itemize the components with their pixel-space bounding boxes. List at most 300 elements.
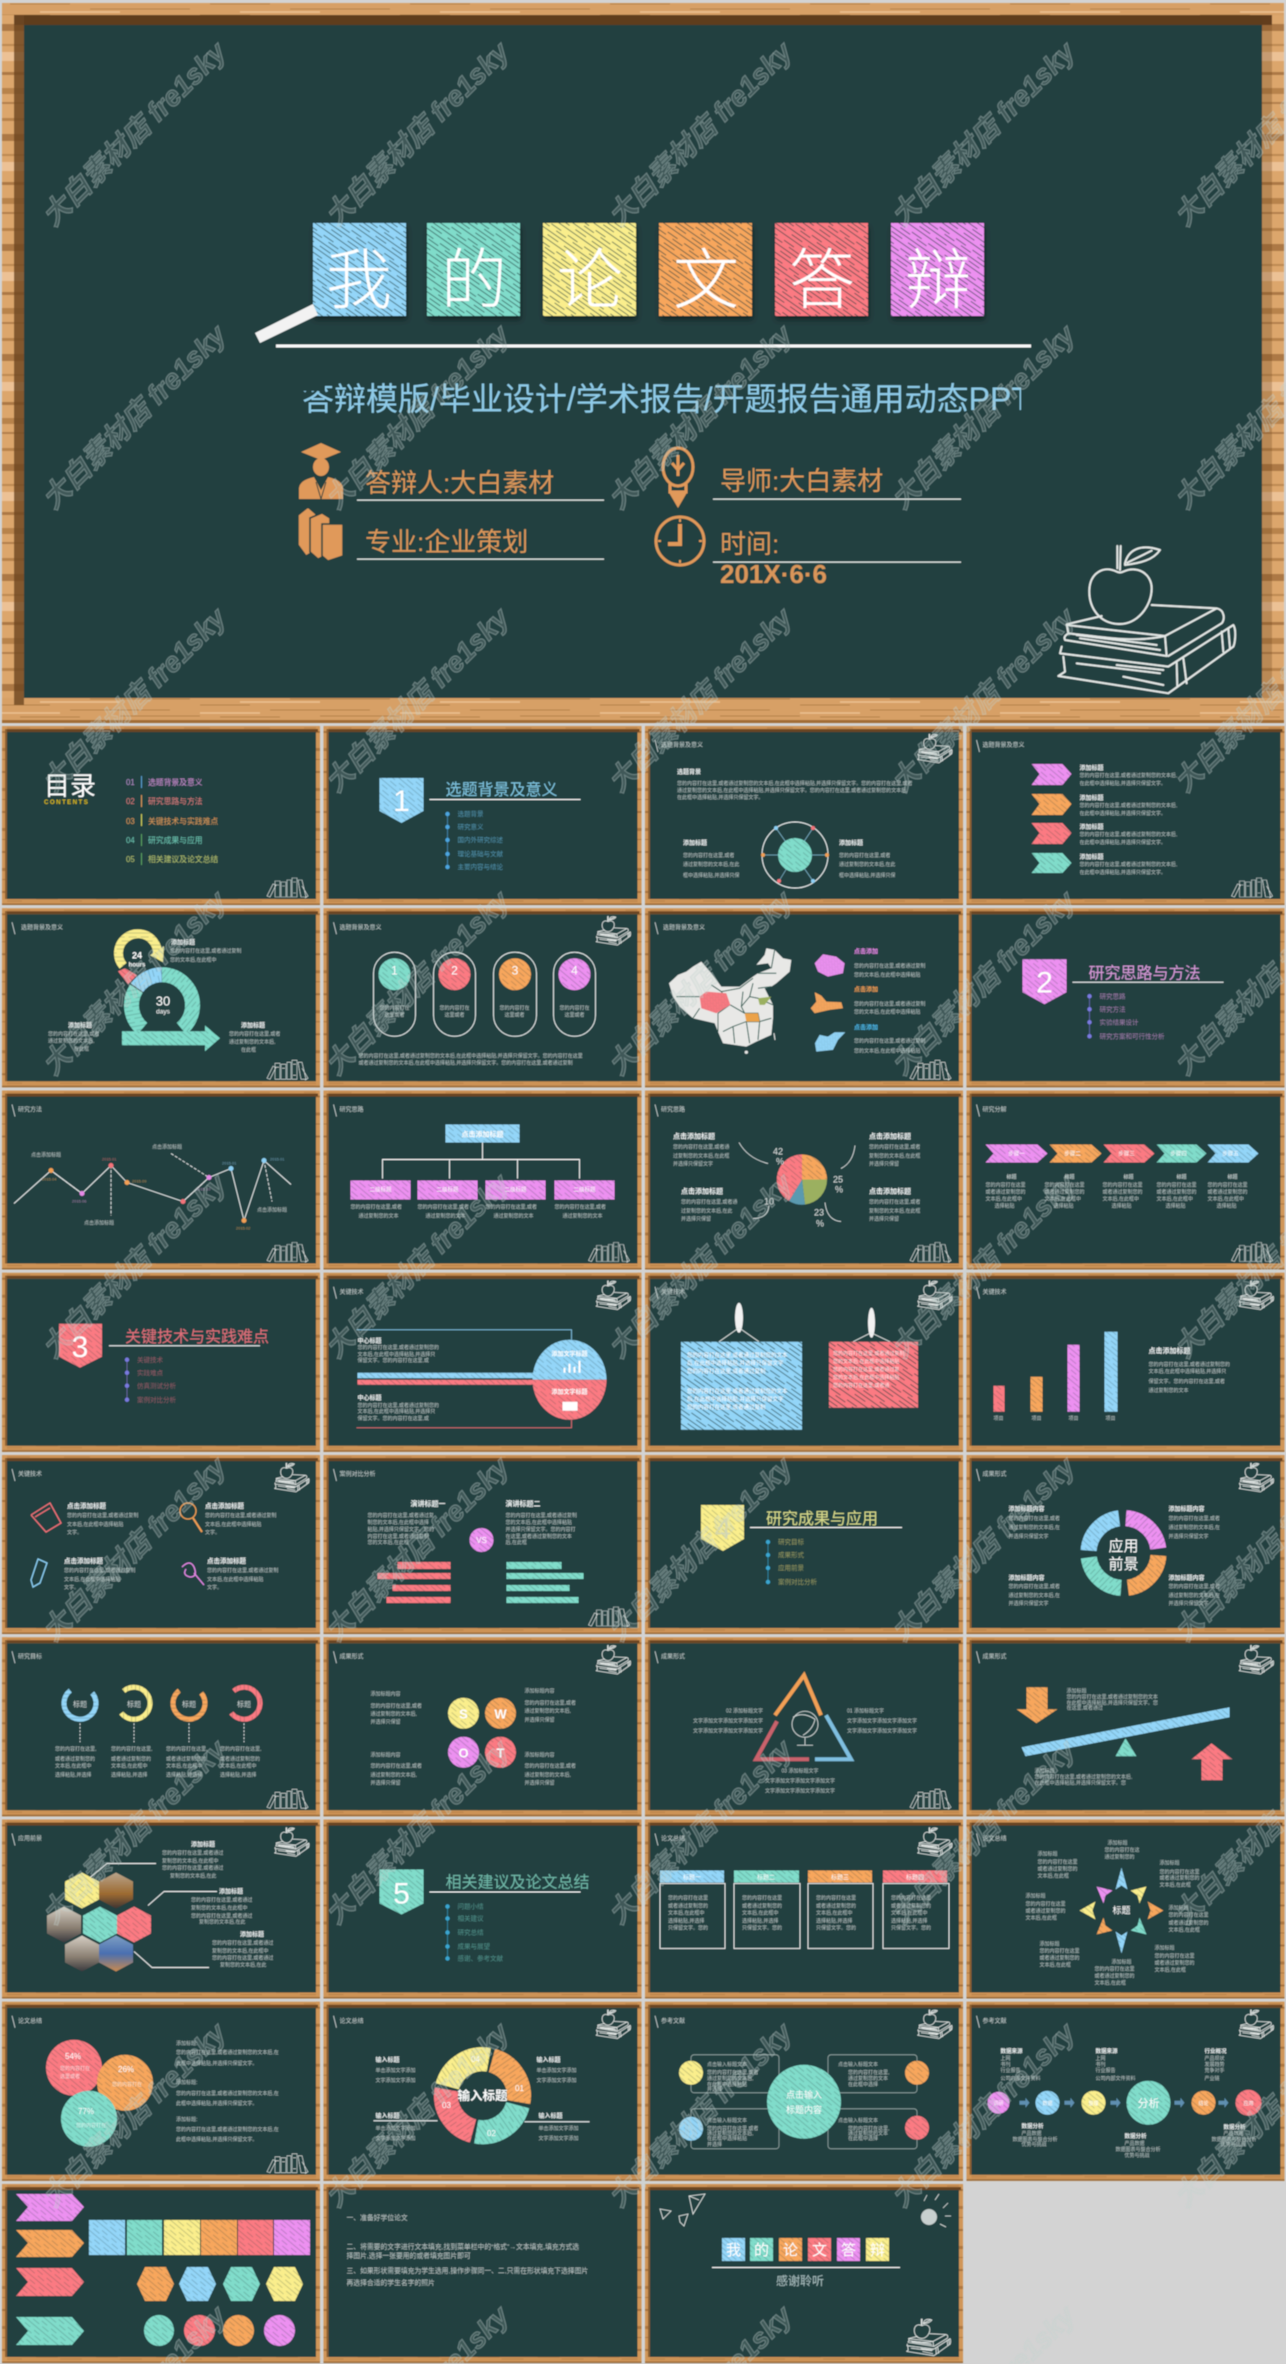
section badge — [701, 1505, 744, 1551]
flow text: 产品数据 — [1124, 2140, 1145, 2147]
star diagram: 标题 — [1112, 1904, 1131, 1916]
seesaw text: 在此框中选择粘贴,并选择只保留文字。您 — [1034, 1779, 1126, 1786]
slide: circular arrows — [2, 1637, 320, 1816]
leader lines — [90, 1864, 217, 1968]
triangle text: 文字添加文字添加文字添加文字 — [765, 1777, 835, 1784]
slide heading: 关键技术 — [661, 1288, 685, 1296]
wooden frame — [2, 3, 1284, 723]
column headers: 标题三 — [831, 1874, 849, 1882]
underline — [712, 2267, 900, 2268]
pins and strings — [719, 1303, 890, 1342]
red bars — [378, 1562, 450, 1603]
slide heading: 研究思路 — [661, 1106, 685, 1114]
box text: 通过复制您的文本 — [848, 2130, 888, 2137]
slide heading — [334, 1104, 364, 1116]
right text — [839, 839, 895, 879]
pills — [374, 952, 596, 1036]
comparison text: 并选择只保留文字。您的内容打 — [506, 1526, 576, 1533]
pill text: 您的内容打在 — [439, 1004, 470, 1011]
ring text: 添加标题内容 — [1168, 1574, 1205, 1582]
column boxes — [660, 1884, 949, 1948]
section badge: 4 — [715, 1513, 731, 1546]
column text: 只保留文字。您的 — [668, 1924, 708, 1932]
icon: books — [298, 507, 343, 561]
triangle text: 文字添加文字添加文字添加文字 — [693, 1727, 763, 1734]
slide: section 4 — [645, 1455, 963, 1634]
map text: 您的文本后,在此框中选择粘贴 — [854, 971, 920, 978]
cycle diagram: 24 — [132, 950, 142, 960]
list text: 您的内容打在这里,或者通过复制您的文本后, — [1080, 831, 1177, 838]
triangle text: 文字添加文字添加文字添加文字 — [693, 1717, 763, 1724]
ring text — [376, 2056, 579, 2142]
triangle arrows — [756, 1675, 851, 1759]
contents list: 01 — [126, 778, 135, 787]
SWOT text: 通过复制您的文本后, — [524, 1771, 571, 1778]
slide heading — [334, 1287, 364, 1299]
flow text: 行业报告 — [1096, 2067, 1116, 2074]
box text: 您的内容打在这里, — [848, 2125, 889, 2132]
column text: 或者通过复制您的 — [816, 1902, 856, 1910]
flow text: 产品现状 — [1204, 2055, 1225, 2062]
column text: 选择粘贴,并选择 — [742, 1918, 778, 1924]
flow text: 公司内部文件资料 — [1000, 2075, 1041, 2082]
seesaw text: 在此框中选择粘贴,并选择只保留文字。您 — [1066, 1699, 1158, 1706]
column text: 选择粘贴,并选择 — [891, 1918, 927, 1924]
star text: 文本后,在此框 — [1154, 1966, 1186, 1974]
columns text — [55, 1745, 261, 1778]
text blocks: 复制您的文本后,在此框 — [869, 1152, 920, 1160]
box text: 点击输入标题文本 — [838, 2117, 878, 2124]
ring labels: 04 — [471, 2055, 480, 2064]
star text: 添加标题 — [1160, 1860, 1180, 1866]
section title: 选题背景及意义 — [446, 780, 558, 799]
ring labels: 输入标题 — [457, 2088, 508, 2103]
section title: 研究思路与方法 — [1088, 964, 1201, 982]
icon text: 文本后,在此框中选择粘贴 — [205, 1521, 261, 1528]
slide heading — [334, 922, 382, 934]
section list — [766, 1537, 818, 1586]
pie values: 10 — [764, 1196, 774, 1206]
slide heading: 选题背景及意义 — [663, 923, 705, 931]
slide heading — [976, 1104, 1007, 1116]
SWOT text: 您的内容打在这里,或者 — [370, 1762, 422, 1769]
flow text: 发展趋势 — [1204, 2061, 1225, 2068]
slide heading: 关键技术 — [982, 1288, 1007, 1296]
columns text: 选择粘贴,并选择 — [55, 1771, 91, 1778]
star text: 您的内容打在这里 — [1168, 1912, 1209, 1918]
chart labels: 2015.06 — [72, 1198, 87, 1204]
box text: 通过复制您的文本后, — [707, 2130, 753, 2137]
slide heading: 论文总结 — [661, 1834, 685, 1842]
contents heading: CONTENTS — [44, 799, 89, 806]
slide heading — [976, 740, 1025, 752]
slide: SWOT — [324, 1637, 642, 1816]
section list — [445, 1902, 504, 1962]
box text: 您的内容打在这里, — [848, 2069, 889, 2076]
arrow labels: 标题 — [182, 1699, 196, 1708]
slide heading: 应用前景 — [18, 1834, 42, 1842]
contents list: 选题背景及意义 — [148, 777, 203, 787]
flow text: 数据来源 — [1000, 2047, 1023, 2055]
text blocks: 通过复制您的文本后, — [48, 1037, 94, 1044]
chart text: 保留文字。您的内容打在这里,或者 — [1148, 1378, 1225, 1385]
slide: arrow list — [966, 726, 1284, 905]
SWOT circles: W — [494, 1706, 507, 1721]
red note: 您的内容打在这里,或者通过复制 — [833, 1350, 904, 1357]
star text: 文本后,在此框 — [1038, 1872, 1069, 1880]
circle text: 您的内容打在这里,或者通过复制您的文本后,在 — [176, 2090, 279, 2097]
section list: 主要内容与结论 — [458, 862, 504, 871]
bars: 项目 — [1105, 1416, 1116, 1422]
box text: 您的内容打在这里,或者 — [350, 1204, 402, 1210]
slide heading — [655, 1104, 685, 1116]
columns text: 选择粘贴,并选择 — [166, 1771, 202, 1778]
bars — [993, 1332, 1118, 1422]
hex text: 添加标题 — [240, 1930, 264, 1938]
blackboard — [24, 25, 1262, 698]
hex text: 您的内容打在这里,或者通过 — [191, 1896, 252, 1904]
circle text: 此框中选择粘贴,并选择只保留文字。 — [176, 2060, 257, 2067]
slide: section 2 — [966, 908, 1284, 1087]
chart labels: 点击添加标题 — [31, 1152, 61, 1158]
ring text: 通过复制您的文本后,在 — [1008, 1592, 1060, 1599]
SWOT text: 添加标题内容 — [524, 1687, 555, 1694]
flow text: 数据图表与整合分析 — [1212, 2136, 1257, 2143]
flow text: 数据分析 — [1224, 2123, 1246, 2131]
slide: map — [645, 908, 963, 1087]
section list — [1087, 991, 1165, 1040]
map of China — [669, 948, 791, 1054]
columns text: 文本后,在此框中 — [220, 1762, 256, 1769]
text blocks: 点击添加标题 — [673, 1132, 715, 1140]
flow text: 数据分析 — [1124, 2132, 1147, 2140]
slide: process flow — [966, 2002, 1284, 2181]
text blocks: 您的内容打在这里,或者 — [48, 1030, 99, 1037]
columns text: 文本后,在此框中 — [166, 1762, 202, 1769]
slide heading — [334, 1651, 364, 1663]
outlined boxes — [691, 2055, 917, 2149]
slide: steps — [966, 1090, 1284, 1270]
ring label: 前景 — [1108, 1556, 1139, 1573]
text blocks: 文本后,在此框中选择粘贴,并选择只 — [358, 1351, 435, 1358]
intro text: 您的内容打在这里,或者通过复制您的文本后,在此框中选择粘贴,并选择只保留文字。您的内容打在这里,或者 — [677, 780, 913, 787]
text blocks: 点击添加标题 — [681, 1186, 723, 1196]
chart labels: 2015.01 — [222, 1160, 237, 1166]
step text: 您的内容打在这里 — [1102, 1182, 1143, 1188]
comparison text: 您的内容打在这里,或者通过复 — [368, 1512, 434, 1519]
list text: 添加标题 — [1080, 853, 1104, 861]
slide: split circle — [324, 1273, 642, 1452]
pill circles: 4 — [571, 963, 578, 977]
slide: ring application — [966, 1455, 1284, 1634]
icon text — [64, 1501, 278, 1591]
seesaw beam — [1022, 1707, 1230, 1756]
contents list: 05 — [126, 855, 135, 864]
ring labels: 01 — [515, 2084, 524, 2093]
ring text: 您的内容打在这里,或者 — [1168, 1515, 1220, 1522]
title: 文 — [673, 243, 739, 317]
text blocks: 文本后,在此框中选择粘贴,并选择只 — [358, 1408, 435, 1415]
flow text: 数据来源 — [1096, 2047, 1118, 2055]
map text: 您的内容打在这里,或者通过复制 — [854, 1037, 925, 1044]
column text: 只保留文字。您的 — [742, 1924, 782, 1932]
step text: 标题 — [1006, 1174, 1017, 1180]
comparison text: 演讲标题一 — [410, 1499, 446, 1508]
text blocks — [358, 1337, 439, 1422]
text blocks: 中心标题 — [358, 1394, 382, 1402]
flow text: 产品数据 — [1224, 2130, 1244, 2137]
text blocks: 您的内容打在这里,或者 — [869, 1198, 920, 1206]
time — [713, 529, 961, 589]
contents list: 04 — [126, 836, 135, 845]
slide heading — [655, 1651, 685, 1663]
slide heading: 论文总结 — [340, 2017, 364, 2025]
ring text: 文字添加文字添加 — [376, 2077, 416, 2084]
slide: background text and circle — [645, 726, 963, 905]
slide: cycle 24 hours 30 days — [2, 908, 320, 1087]
box text: 您的内容打在这里,或者 — [486, 1204, 537, 1210]
section list: 研究意义 — [458, 822, 484, 831]
percent circles: 77% — [78, 2107, 94, 2116]
ring text: 并选择只保留文字 — [1168, 1600, 1209, 1607]
star text: 文本后,在此框 — [1094, 1980, 1126, 1986]
section list: 理论基础与文献 — [458, 849, 504, 858]
slide heading — [12, 922, 63, 934]
lower boxes: 二级标题 — [436, 1186, 459, 1194]
text blocks: 并选择只保留 — [869, 1160, 899, 1168]
list text: 在此框中选择粘贴,并选择只保留文字。 — [1080, 869, 1166, 876]
pill text: 您的内容打在 — [559, 1004, 590, 1011]
bars: 项目 — [993, 1416, 1004, 1422]
mini title tiles: 我 — [726, 2242, 741, 2259]
circle text: 添加标题: — [176, 2116, 197, 2123]
cycle diagram: days — [156, 1008, 171, 1015]
ovals — [144, 2315, 295, 2346]
comparison text: 演讲标题二 — [506, 1499, 540, 1508]
section list: 研究目标 — [778, 1537, 804, 1546]
text blocks: 添加标题 — [171, 938, 195, 946]
section badge — [380, 778, 424, 823]
slide heading: 关键技术 — [340, 1288, 364, 1296]
slide heading — [655, 740, 703, 752]
icon: clock — [656, 517, 704, 565]
subtitle: 答辩模版/毕业设计/学术报告/开题报告通用动态PPT — [302, 381, 1031, 417]
columns text: 文本后,在此框中 — [55, 1762, 91, 1769]
triangle text: 文字添加文字添加文字添加文字 — [847, 1727, 917, 1734]
ring text: 并选择只保留文字 — [1008, 1533, 1049, 1540]
column text: 文本后,在此框中 — [816, 1910, 852, 1916]
star text: 或者通过复制您的 — [1160, 1874, 1200, 1882]
section list: 问题小结 — [458, 1902, 484, 1910]
column text: 文本后,在此框中 — [742, 1910, 778, 1916]
text blocks: 过复制您的文本后,在此框 — [673, 1152, 729, 1160]
contents list: 研究思路与方法 — [148, 796, 203, 806]
column headers: 标题四 — [906, 1874, 924, 1882]
advisor: 导师:大白素材 — [720, 466, 883, 496]
map text: 点击添加 — [854, 947, 878, 955]
icon text: 点击添加标题 — [205, 1501, 244, 1510]
instructions text: 择图片,选择一张要用的或者填充图片即可 — [346, 2251, 471, 2260]
percent circles — [46, 2040, 153, 2147]
slide: bar chart — [966, 1273, 1284, 1452]
mini title tiles: 的 — [754, 2242, 769, 2259]
slide: ring segments — [324, 2002, 642, 2181]
percent circles: 这里或者 — [60, 2073, 80, 2080]
step text: 选择粘贴 — [994, 1202, 1015, 1210]
ring text: 单击添加文字添加 — [538, 2125, 579, 2132]
percent circles: 26% — [118, 2065, 134, 2074]
box text — [350, 1204, 606, 1220]
fulcrum — [1116, 1738, 1136, 1756]
text blocks: 您的内容打在这里,或者 — [229, 1030, 280, 1037]
section list: 应用前景 — [778, 1563, 804, 1572]
title underline — [276, 344, 1031, 348]
step text: 或者通过复制您的 — [1156, 1188, 1197, 1196]
time: 时间: — [720, 529, 779, 559]
ring text: 通过复制您的文本后,在 — [1008, 1524, 1060, 1531]
SWOT text: 并选择只保留 — [370, 1718, 401, 1725]
step text: 文本后,在此框中 — [1208, 1196, 1244, 1202]
ring text: 单击添加文字添加 — [376, 2125, 416, 2132]
chart text: 文本后,在此框中选择粘贴,并选择只 — [1148, 1368, 1226, 1375]
star text: 添加标题 — [1154, 1944, 1175, 1952]
section list: 研究总结 — [458, 1928, 484, 1936]
slide heading — [655, 2016, 685, 2028]
intro text: 在此框中选择粘贴,并选择只保留文字。 — [677, 794, 763, 801]
star text: 添加标题 — [1038, 1850, 1058, 1858]
body text — [358, 1052, 583, 1066]
ring text: 您的内容打在这里,或者 — [1008, 1583, 1060, 1590]
province shapes — [811, 954, 845, 1052]
triangle text: 01 添加标题文字 — [847, 1707, 884, 1714]
chalk stick — [255, 304, 318, 343]
lower boxes: 二级标题 — [369, 1186, 392, 1194]
cycle diagram: 30 — [156, 993, 170, 1008]
box text: 在此框中选择 — [848, 2135, 878, 2142]
icon text: 文字。 — [205, 1529, 220, 1536]
major: 专业:企业策划 — [365, 527, 528, 557]
slide heading: 选题背景及意义 — [982, 741, 1025, 749]
text blocks: 添加标题 — [68, 1021, 92, 1029]
step text: 文本后,在此框中 — [1102, 1196, 1139, 1202]
arrow labels: 标题 — [127, 1699, 141, 1708]
chevrons — [1032, 764, 1072, 873]
pill text: 您的内容打在 — [379, 1004, 410, 1011]
flow arrows — [1020, 2098, 1228, 2108]
text blocks: 并选择只保留文字 — [673, 1160, 713, 1168]
step text: 选择粘贴 — [1166, 1202, 1186, 1210]
section badge — [59, 1324, 102, 1368]
columns text: 选择粘贴,并选择 — [111, 1771, 147, 1778]
pill circles: 1 — [391, 963, 398, 977]
instructions text: 三、如果形状需要填充为学生选用,操作步骤同一、二,只需在形状填充下选择图片 — [346, 2266, 588, 2275]
chart labels: 2015.01 — [270, 1156, 285, 1162]
arrow labels: 标题 — [237, 1699, 251, 1708]
box text: 通过复制您的文本 — [494, 1212, 534, 1220]
circle text: 此框中选择粘贴,并选择只保留文字。 — [176, 2136, 257, 2143]
cycle diagram: hours — [129, 962, 146, 968]
outline connectors — [356, 1330, 572, 1340]
flow text: 上网 — [1096, 2055, 1106, 2062]
thanks text: 感谢聆听 — [776, 2273, 824, 2288]
slide: comparison — [324, 1455, 642, 1634]
slide heading — [334, 1469, 376, 1481]
hex text: 复制您的文本后,在此 — [170, 1872, 216, 1880]
SWOT text: 通过复制您的文本后, — [524, 1707, 571, 1714]
pie values — [764, 1146, 843, 1228]
section list: 成果与展望 — [458, 1942, 490, 1950]
slide heading — [976, 1834, 1007, 1846]
slide: line chart — [2, 1090, 320, 1270]
center oval: 点击输入 — [786, 2089, 822, 2100]
list text: 在此框中选择粘贴,并选择只保留文字。 — [1080, 839, 1166, 846]
main cover slide — [2, 3, 1284, 723]
icon: light bulb — [663, 448, 693, 505]
step chevrons: 步骤二 — [1064, 1150, 1081, 1158]
icon text: 您的内容打在这里,或者通过复制 — [207, 1567, 278, 1574]
box text: 并选择 — [707, 2141, 722, 2148]
pill circles: 2 — [451, 963, 458, 977]
slide: contents — [2, 726, 320, 905]
SWOT text: 并选择只保留 — [370, 1779, 401, 1786]
columns text: 或者通过复制您的 — [111, 1755, 151, 1762]
text blocks: 点击添加标题 — [869, 1186, 911, 1196]
flow text — [1000, 2047, 1257, 2159]
text blocks: 过复制您的文本后,在此 — [681, 1208, 732, 1214]
hex text: 您的内容打在这里,或者通过 — [212, 1954, 273, 1962]
box text: 在此框中选择 — [848, 2081, 878, 2088]
columns text: 您的内容打在这里, — [55, 1745, 96, 1752]
slide: section 1 — [324, 726, 642, 905]
title — [326, 243, 971, 317]
contents list: 03 — [126, 817, 135, 826]
chart text: 通过复制您的文本 — [1148, 1387, 1189, 1394]
box text: 点击输入标题文本 — [707, 2117, 747, 2124]
slide heading: 论文总结 — [18, 2017, 42, 2025]
seesaw text: 您的内容打在这里,或者通过复制您的文本后, — [1034, 1773, 1132, 1780]
section list: 案例对比分析 — [137, 1395, 176, 1404]
column text: 您的内容打在这里 — [668, 1894, 708, 1902]
pie values: 25 — [833, 1174, 843, 1184]
section list: 研究思路 — [1100, 991, 1126, 1000]
comparison text — [368, 1499, 577, 1546]
slide: thanks — [645, 2184, 963, 2363]
chart labels: 2015.04 — [42, 1176, 57, 1182]
section badge — [380, 1870, 424, 1914]
slide: percent circles — [2, 2002, 320, 2181]
slide heading: 成果形式 — [982, 1470, 1007, 1478]
slide heading — [12, 1834, 42, 1846]
box text — [707, 2061, 889, 2148]
list text: 您的内容打在这里,或者通过复制您的文本后, — [1080, 861, 1177, 868]
star text: 您的内容打在这里 — [1038, 1858, 1078, 1866]
column headers: 标题二 — [757, 1874, 775, 1882]
ring text: 输入标题 — [376, 2056, 400, 2064]
center oval: 标题内容 — [786, 2104, 822, 2115]
icon text: 文字。 — [207, 1584, 222, 1591]
mini title tiles: 论 — [783, 2242, 798, 2259]
circle diagram — [761, 822, 829, 888]
contents list: 02 — [126, 797, 135, 806]
map text: 您的文本后,在此框中选择粘贴 — [854, 1008, 920, 1015]
circle text: 此框中选择粘贴,并选择只保留文字。 — [176, 2100, 257, 2107]
pill text: 这里或者 — [564, 1011, 585, 1018]
text blocks: 您的内容打在这里,或者通过复制您的 — [358, 1402, 439, 1409]
section list: 研究方案和可行性分析 — [1100, 1031, 1165, 1040]
triangle text: 02 添加标题文字 — [726, 1707, 763, 1714]
chart labels: 点击添加标题 — [257, 1206, 287, 1214]
text blocks — [48, 938, 280, 1053]
